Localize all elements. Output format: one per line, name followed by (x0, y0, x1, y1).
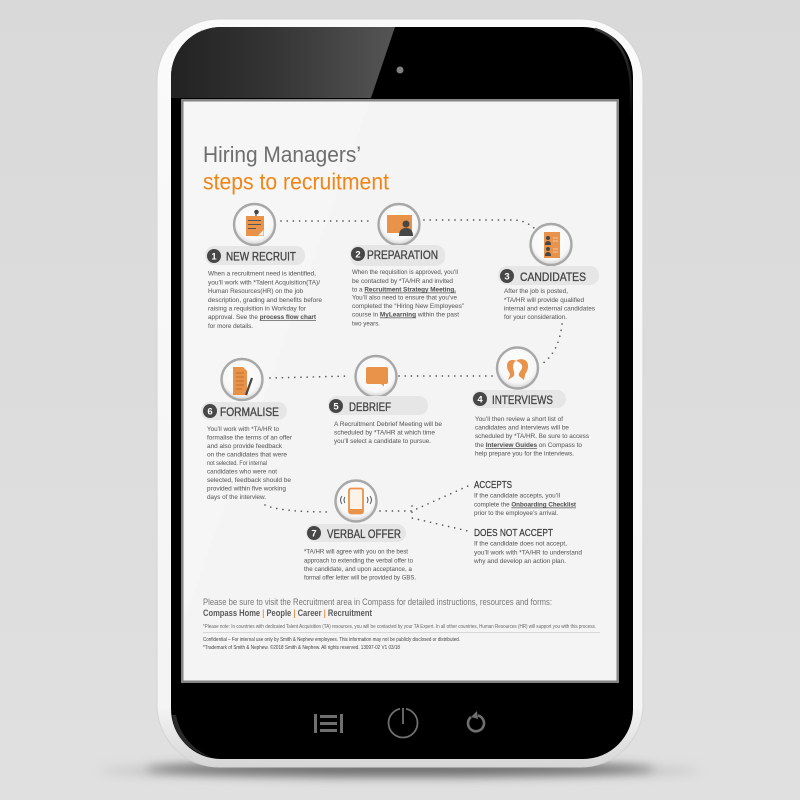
heading: FORMALISE (220, 405, 279, 419)
outcome: does not accept: why and develop an action plan. (473, 558, 566, 565)
footer: legal (203, 637, 460, 651)
text: A Recruitment Debrief Meeting will be (334, 421, 442, 428)
text: *TA/HR will agree with you on the best (304, 548, 408, 556)
dotted connectors (265, 220, 562, 531)
tablet device (157, 19, 643, 767)
footer: legal: *Trademark of Smith & Nephew. ©2018 Smith & Nephew. All rights reserved. 13097-02 V1 03/18 (203, 644, 400, 651)
footer: compass links: Compass Home | People | Career | Recruitment (203, 608, 373, 619)
step 2: preparation (350, 204, 464, 328)
text: scheduled by *TA/HR at which time (334, 430, 435, 436)
outcome: accepts (474, 480, 577, 517)
icon: document and pen (222, 359, 262, 400)
outcome: accepts: complete the Onboarding Checklist (474, 502, 577, 508)
heading (350, 245, 445, 266)
top glare (171, 27, 395, 98)
text: help prepare you for the interviews. (475, 450, 574, 458)
text: approval. See the process flow chart (208, 314, 317, 321)
icon: speech bubble (356, 356, 396, 397)
screen glare (184, 102, 370, 620)
text (304, 548, 416, 582)
text: you’ll work with *Talent Acquisition(TA)/ (208, 280, 320, 286)
step 1: new recruit (205, 204, 322, 330)
text: not selected. For internal (207, 460, 267, 467)
heading (201, 402, 287, 420)
footer: compass links: Please be sure to visit the Recruitment area in Compass for detailed instructions, resources and forms: (203, 597, 552, 608)
text (207, 426, 293, 501)
footer: compass links (203, 597, 552, 619)
step 5: debrief (328, 356, 442, 445)
power button (388, 706, 418, 738)
text: formalise the terms of an offer (207, 434, 293, 442)
text: two years. (352, 320, 380, 328)
heading: 3 (504, 271, 510, 282)
heading (306, 524, 406, 542)
heading (328, 396, 428, 415)
title (203, 142, 390, 194)
back button (468, 711, 484, 731)
footer: legal: Confidential – For internal use only by Smith & Nephew employees. This information may not be publicly disclosed or distributed. (203, 637, 460, 643)
outcome: does not accept: you’ll work with *TA/HR to understand (474, 550, 582, 556)
heading: INTERVIEWS (492, 393, 553, 407)
text: course in MyLearning within the past (352, 312, 459, 318)
lower left highlight (172, 715, 212, 758)
text: raising a requisition in Workday for (208, 306, 307, 312)
text (208, 270, 322, 330)
heading: 6 (207, 406, 213, 417)
icon: badge (234, 204, 275, 245)
text: you’ll select a candidate to pursue. (334, 438, 431, 445)
white outer rim (157, 19, 643, 767)
infographic content (201, 142, 600, 651)
text: description, grading and benefits before (208, 297, 322, 304)
icon: presenter (378, 204, 420, 245)
text: completed the “Hiring New Employees” (352, 303, 464, 310)
text: to a Recruitment Strategy Meeting. (352, 286, 456, 294)
heading: 5 (333, 401, 339, 412)
footer: note: *Please note: In countries with dedicated Talent Acquisition (TA) resources, you will be contacted by your TA Expert. In all other countries, Human Resources (HR) will support you with this process. (203, 624, 596, 630)
step 4: interviews (472, 348, 590, 458)
heading: DEBRIEF (349, 400, 391, 414)
right edge highlight (595, 29, 631, 120)
text: the Interview Guides on Compass to (475, 442, 582, 449)
text: You’ll work with *TA/HR to (207, 426, 279, 433)
outcome: accepts: prior to the employee’s arrival. (474, 510, 558, 517)
outcome: does not accept: If the candidate does not accept, (474, 540, 567, 548)
camera (396, 66, 404, 74)
text: scheduled by *TA/HR. Be sure to access (475, 433, 590, 440)
text: selected, feedback should be (207, 477, 291, 484)
text: approach to extending the verbal offer to (304, 558, 413, 564)
heading: PREPARATION (367, 248, 438, 262)
black body (171, 27, 633, 759)
text: You’ll also need to ensure that you’ve (352, 294, 457, 302)
screen (182, 100, 618, 682)
text (334, 421, 442, 445)
heading (472, 390, 566, 408)
icon: ringing phone (336, 480, 376, 522)
heading: CANDIDATES (520, 270, 586, 284)
menu button (314, 714, 343, 733)
heading: NEW RECRUIT (226, 250, 297, 264)
outcome: accepts: ACCEPTS (474, 480, 512, 491)
text: internal and external candidates (504, 306, 596, 312)
text: be contacted by *TA/HR and invited (352, 278, 453, 285)
heading (498, 266, 599, 285)
text: formal offer letter will be provided by GBS. (304, 574, 416, 582)
text: candidates who were not (207, 468, 277, 476)
text: for your consideration. (504, 314, 567, 321)
text (352, 269, 464, 328)
heading: 4 (477, 394, 483, 405)
heading: VERBAL OFFER (327, 527, 401, 541)
text: candidates and interviews will be (475, 424, 569, 432)
text: You’ll then review a short list of (475, 416, 563, 423)
outcome: accepts: If the candidate accepts, you’ll (474, 492, 561, 500)
title: Hiring Managers’ (203, 142, 361, 167)
title: steps to recruitment (203, 168, 390, 194)
step 6: formalise (201, 359, 293, 501)
step 7: verbal offer (304, 480, 416, 582)
text: When a recruitment need is identified, (208, 270, 316, 278)
outcome: does not accept: DOES NOT ACCEPT (474, 528, 553, 539)
icon: cv sheets (530, 224, 572, 265)
text: days of the interview. (207, 494, 266, 501)
heading: 7 (311, 528, 317, 539)
text (475, 416, 590, 458)
outcome: does not accept (473, 528, 582, 565)
step 3: candidates (498, 224, 599, 321)
text: When the requisition is approved, you’ll (352, 269, 458, 276)
heading (205, 246, 305, 265)
text: After the job is posted, (504, 288, 568, 295)
text (504, 288, 596, 321)
text: provided within five working (207, 486, 286, 492)
text: and also provide feedback (207, 443, 283, 450)
icon: speech heads (497, 348, 538, 388)
text: on the candidates that were (207, 452, 287, 458)
device shadow (100, 762, 700, 777)
text: the candidate, and upon acceptance, a (304, 566, 412, 573)
text: for more details. (208, 323, 253, 330)
text: *TA/HR will provide qualified (504, 297, 584, 304)
heading: 2 (355, 249, 361, 260)
text: Human Resources(HR) on the job (208, 288, 303, 295)
heading: 1 (211, 251, 217, 262)
